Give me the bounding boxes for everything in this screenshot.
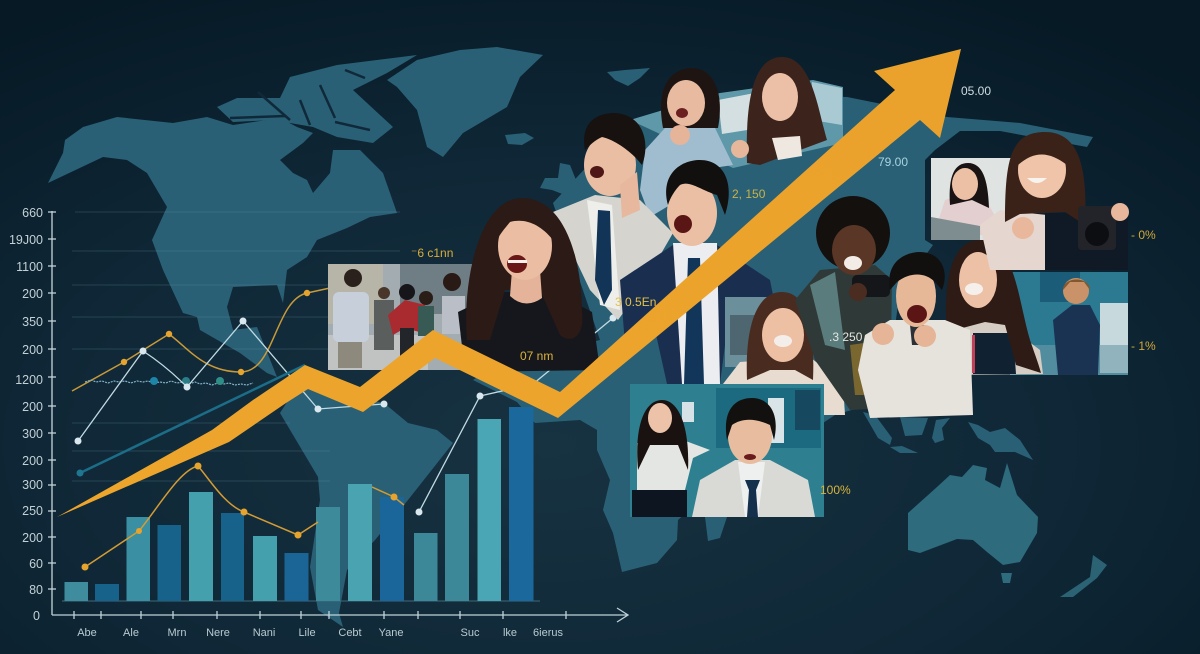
teal line chart: [76, 365, 305, 476]
photo: laptop woman: [931, 158, 1013, 240]
axis labels: 200: [22, 531, 43, 545]
lower orange line chart: [82, 462, 404, 570]
photo: office pair: [630, 384, 824, 517]
grid lines: [72, 212, 400, 481]
map: Australia: [908, 463, 1038, 565]
photo: street group: [328, 264, 485, 370]
map: Greenland: [387, 47, 543, 157]
map: Arctic channels: [230, 70, 370, 130]
data labels: 2, 150: [732, 187, 766, 201]
x axis labels: Suc: [461, 627, 480, 639]
white line chart right: [416, 314, 616, 516]
axis labels: 60: [29, 557, 43, 571]
map: New Zealand: [1060, 555, 1107, 597]
axis labels: 19J00: [9, 233, 43, 247]
x axis labels: Nere: [206, 627, 230, 639]
axis labels: 660: [22, 206, 43, 220]
axis labels: 300: [22, 427, 43, 441]
map: Iceland: [505, 133, 534, 145]
white line chart: [74, 318, 388, 444]
photo: woman in navy vest: [945, 240, 1043, 375]
axis labels: 1200: [15, 373, 43, 387]
axis labels: 1100: [16, 260, 43, 274]
world map: [48, 47, 1107, 627]
map: Borneo: [900, 417, 928, 436]
map: Java: [890, 446, 918, 453]
noisy sparkline: [85, 377, 253, 385]
photo: curly haired person: [795, 196, 892, 410]
x axis labels: Cebt: [338, 627, 362, 639]
photo: man in navy suit: [620, 160, 775, 384]
map: Eurasia and Africa: [473, 93, 1093, 572]
axis labels: 0: [33, 609, 40, 623]
data labels: 05.00: [961, 84, 991, 98]
photo: woman with long hair: [630, 57, 843, 168]
left value axis: [9, 206, 56, 623]
data labels: 100%: [820, 483, 851, 497]
data labels: 3 0.5En: [615, 295, 656, 309]
map: Madagascar: [705, 517, 727, 541]
map: Sulawesi: [932, 418, 950, 443]
axis labels: 300: [22, 478, 43, 492]
map: North America: [48, 117, 397, 377]
axis labels: 200: [22, 343, 43, 357]
upper orange line chart: [72, 288, 330, 391]
axis labels: 200: [22, 287, 43, 301]
x axis labels: Yane: [379, 627, 403, 639]
data labels: [411, 84, 1156, 497]
axis labels: 250: [22, 504, 43, 518]
main growth arrow: [57, 49, 961, 517]
x axis labels: Nani: [253, 627, 275, 639]
x axis labels: [77, 627, 563, 639]
axis labels: [9, 206, 43, 623]
photo: woman laughing in black: [458, 198, 600, 372]
photo: man cheering in white shirt: [858, 252, 973, 418]
data labels: 07 nm: [520, 349, 553, 363]
map: South America: [280, 385, 453, 627]
photo: teal office backdrop with woman: [723, 292, 845, 415]
x axis labels: lke: [503, 627, 517, 639]
data labels: ⁻6 c1nn: [411, 246, 453, 260]
data labels: .3 250: [829, 330, 863, 344]
map: New Guinea: [968, 422, 1033, 460]
x axis labels: Lile: [298, 627, 316, 639]
photo: woman with camera: [980, 132, 1129, 270]
axis labels: 350: [22, 315, 43, 329]
photo: man in light suit: [553, 113, 673, 320]
data labels: 79.00: [878, 155, 908, 169]
photo: blue office with man: [1010, 272, 1128, 375]
bar chart: [62, 407, 540, 601]
x axis labels: Ale: [123, 627, 139, 639]
photo: woman in blue shirt: [640, 68, 733, 217]
map: Sumatra: [863, 412, 892, 445]
map: British Isles: [540, 163, 580, 195]
x axis labels: 6ierus: [533, 627, 563, 639]
x axis labels: Abe: [77, 627, 97, 639]
x axis with arrow: [52, 608, 628, 639]
map: Tasmania: [1001, 573, 1012, 583]
axis labels: 200: [22, 454, 43, 468]
axis labels: 200: [22, 400, 43, 414]
map: Arctic islands: [217, 55, 417, 143]
x axis labels: Mrn: [168, 627, 186, 639]
axis labels: 80: [29, 583, 43, 597]
data labels: - 1%: [1131, 339, 1156, 353]
data labels: - 0%: [1131, 228, 1156, 242]
map: Svalbard: [607, 68, 650, 86]
